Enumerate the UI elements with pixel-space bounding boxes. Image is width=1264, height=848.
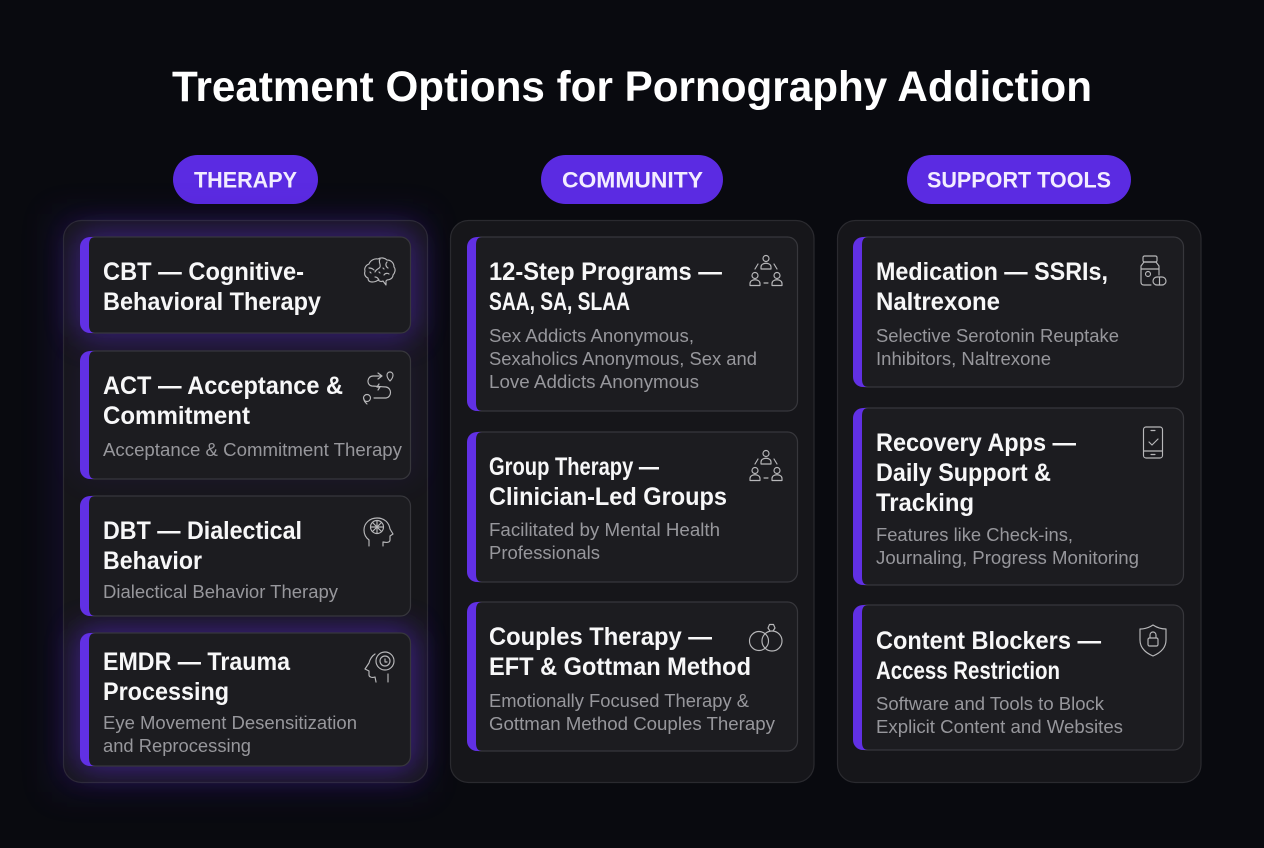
card: recovery apps: Daily Support & <box>876 459 1051 487</box>
icon: winding path <box>364 372 393 404</box>
icon: phone with check <box>1144 427 1162 458</box>
card: group therapy: Professionals <box>489 543 600 563</box>
pill: therapy <box>173 155 318 204</box>
card: CBT <box>80 237 410 333</box>
card: CBT: Behavioral Therapy <box>103 288 321 316</box>
card: EMDR: Processing <box>103 678 229 706</box>
icon: brain <box>365 258 395 285</box>
card: couples therapy: Gottman Method Couples Therapy <box>489 714 775 734</box>
card: ACT: Acceptance & Commitment Therapy <box>103 440 402 460</box>
card: content blockers: Explicit Content and Websites <box>876 717 1123 737</box>
card: DBT <box>80 496 410 616</box>
panel: community <box>450 220 814 782</box>
card: ACT: Commitment <box>103 402 251 430</box>
card: group therapy: Facilitated by Mental Health <box>489 520 720 540</box>
panel: therapy <box>52 214 428 792</box>
icon: pill bottle <box>1141 256 1166 285</box>
title: Treatment Options for Pornography Addiction <box>172 63 1092 111</box>
card: recovery apps: Journaling, Progress Monitoring <box>876 548 1139 568</box>
card: DBT: Behavior <box>103 547 202 575</box>
card: recovery apps: Recovery Apps — <box>876 429 1076 457</box>
pill: therapy: THERAPY <box>194 168 297 192</box>
card: 12-step <box>467 237 798 411</box>
card: EMDR: Eye Movement Desensitization <box>103 713 357 733</box>
card: group therapy <box>467 432 798 582</box>
card: 12-step: Love Addicts Anonymous <box>489 372 699 392</box>
icon: head with spiral <box>365 652 394 682</box>
card: 12-step: Sex Addicts Anonymous, <box>489 326 694 346</box>
card: couples therapy <box>467 602 798 751</box>
card: couples therapy: Couples Therapy — <box>489 623 712 651</box>
card: ACT <box>80 351 410 479</box>
card: content blockers: Access Restriction <box>876 657 1060 685</box>
card: recovery apps: Features like Check-ins, <box>876 525 1073 545</box>
card: medication: Inhibitors, Naltrexone <box>876 349 1051 369</box>
card: CBT: CBT — Cognitive- <box>103 258 304 286</box>
card: medication: Medication — SSRIs, <box>876 258 1108 286</box>
icon: shield with lock <box>1140 625 1166 656</box>
card: medication <box>853 237 1184 387</box>
card: couples therapy: EFT & Gottman Method <box>489 653 751 681</box>
card: EMDR <box>80 633 410 766</box>
pill: community <box>541 155 723 204</box>
card: recovery apps <box>853 408 1184 585</box>
card: group therapy: Group Therapy — <box>489 453 659 481</box>
pill: support tools <box>907 155 1131 204</box>
card: 12-step: SAA, SA, SLAA <box>489 288 630 316</box>
icon: people circle <box>750 256 782 286</box>
icon: rings <box>750 624 782 651</box>
card: group therapy: Clinician-Led Groups <box>489 483 727 511</box>
pill: support tools: SUPPORT TOOLS <box>927 168 1111 192</box>
icon: head with mesh <box>364 518 393 546</box>
card: content blockers: Content Blockers — <box>876 627 1101 655</box>
panel: support tools <box>838 220 1201 782</box>
card: content blockers <box>853 605 1184 750</box>
card: 12-step: 12-Step Programs — <box>489 258 722 286</box>
icon: group circle <box>750 450 782 480</box>
card: content blockers: Software and Tools to Block <box>876 694 1105 714</box>
card: DBT: Dialectical Behavior Therapy <box>103 582 338 602</box>
card: EMDR: EMDR — Trauma <box>103 648 291 676</box>
card: EMDR: and Reprocessing <box>103 736 251 756</box>
card: DBT: DBT — Dialectical <box>103 517 302 545</box>
card: medication: Selective Serotonin Reuptake <box>876 326 1119 346</box>
pill: community: COMMUNITY <box>562 168 703 192</box>
card: recovery apps: Tracking <box>876 489 974 517</box>
card: 12-step: Sexaholics Anonymous, Sex and <box>489 349 757 369</box>
card: medication: Naltrexone <box>876 288 1000 316</box>
card: couples therapy: Emotionally Focused Therapy & <box>489 691 749 711</box>
card: ACT: ACT — Acceptance & <box>103 372 343 400</box>
